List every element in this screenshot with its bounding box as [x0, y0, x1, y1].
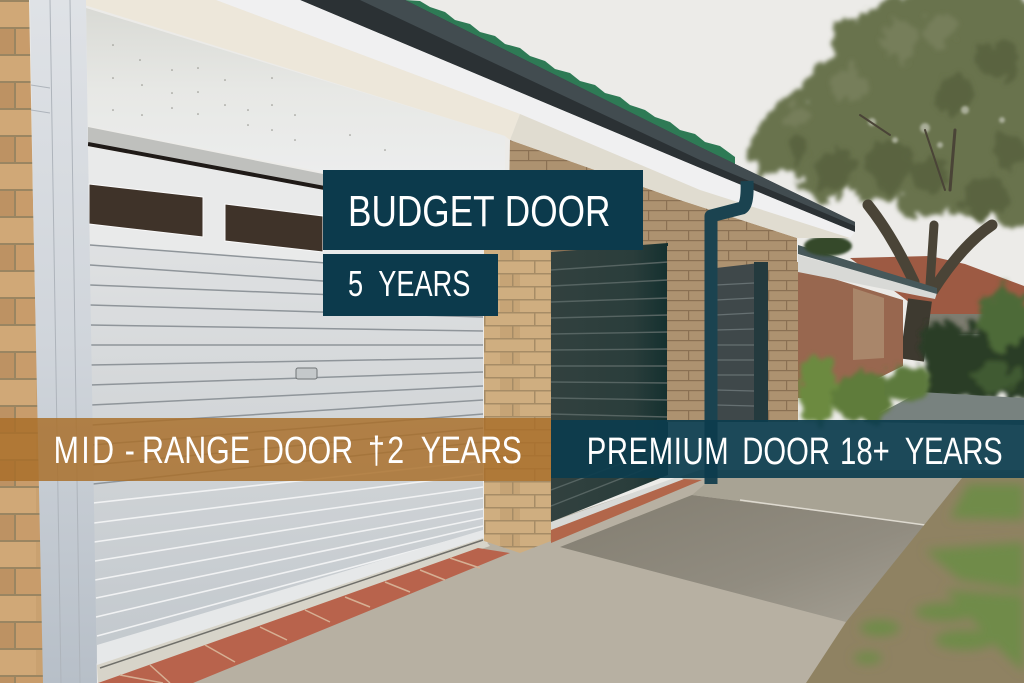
- white garage door: [88, 144, 500, 665]
- right house brick wall: [798, 268, 903, 398]
- mid-range label: RANGE: [142, 430, 250, 472]
- downpipe: [711, 181, 747, 484]
- budget label: BUDGET: [348, 187, 495, 236]
- sill under door: [97, 538, 490, 683]
- mid-range label: -: [125, 430, 135, 472]
- budget label: DOOR: [505, 187, 610, 236]
- door bottom rail: [97, 530, 483, 665]
- mid-range label: YEARS: [421, 430, 521, 472]
- door header opening: [88, 127, 323, 190]
- premium band: [551, 420, 1024, 478]
- right eave soffit: [510, 114, 850, 238]
- ground base: [190, 470, 1024, 683]
- years label: 5: [348, 263, 363, 304]
- concrete middle slab: [560, 495, 927, 622]
- dark grey roller door: [716, 262, 768, 422]
- concrete near slab: [190, 545, 845, 683]
- right house wall panel: [853, 288, 884, 360]
- budget heading panel: [323, 170, 643, 250]
- door frame: [30, 0, 97, 683]
- premium label: YEARS: [905, 430, 1002, 473]
- mid-range label: DOOR: [262, 430, 353, 472]
- door shadow: [100, 540, 483, 668]
- driveway far section: [863, 392, 1024, 425]
- right house roof tiles: [850, 256, 1024, 318]
- door rail: [88, 144, 330, 189]
- gutter highlight: [360, 0, 855, 226]
- premium label: DOOR: [742, 430, 830, 473]
- roof fascia and gutter: [300, 0, 855, 232]
- wall panel above door: [86, 8, 505, 172]
- right house grey wall: [925, 314, 985, 334]
- roof tile edge: [405, 0, 735, 170]
- second door sill: [551, 476, 684, 530]
- brick left wall: [0, 0, 44, 683]
- budget years panel: [323, 254, 498, 316]
- white fascia board: [216, 0, 855, 238]
- brick wall behind gutter: [505, 140, 797, 422]
- trunk and branches: [860, 115, 992, 360]
- end brick pillar: [768, 262, 798, 422]
- premium label: PREMIUM: [587, 430, 729, 473]
- grass verge: [806, 478, 1024, 683]
- brick strip: [98, 548, 510, 683]
- brick pier: [484, 250, 551, 553]
- years label: YEARS: [378, 263, 470, 304]
- right hedge: [922, 286, 1024, 398]
- small dark tree behind eave: [804, 236, 852, 256]
- premium label: 18+: [840, 430, 890, 473]
- door slats: [90, 245, 483, 484]
- slab joint: [740, 500, 925, 525]
- dark green roller door: [551, 243, 668, 522]
- tree canopy: [748, 0, 1024, 228]
- second door brick strip: [551, 479, 702, 543]
- concrete far slab: [692, 478, 962, 525]
- door handle: [296, 368, 317, 379]
- door windows: [89, 184, 323, 252]
- mid-range label: MID: [54, 430, 117, 472]
- soffit: [75, 0, 520, 140]
- mid-range label: †2: [368, 430, 407, 472]
- brick pillar between doors: [667, 246, 705, 422]
- bushes: [798, 352, 931, 424]
- mid-range band: [0, 418, 551, 481]
- right house eave: [798, 245, 937, 299]
